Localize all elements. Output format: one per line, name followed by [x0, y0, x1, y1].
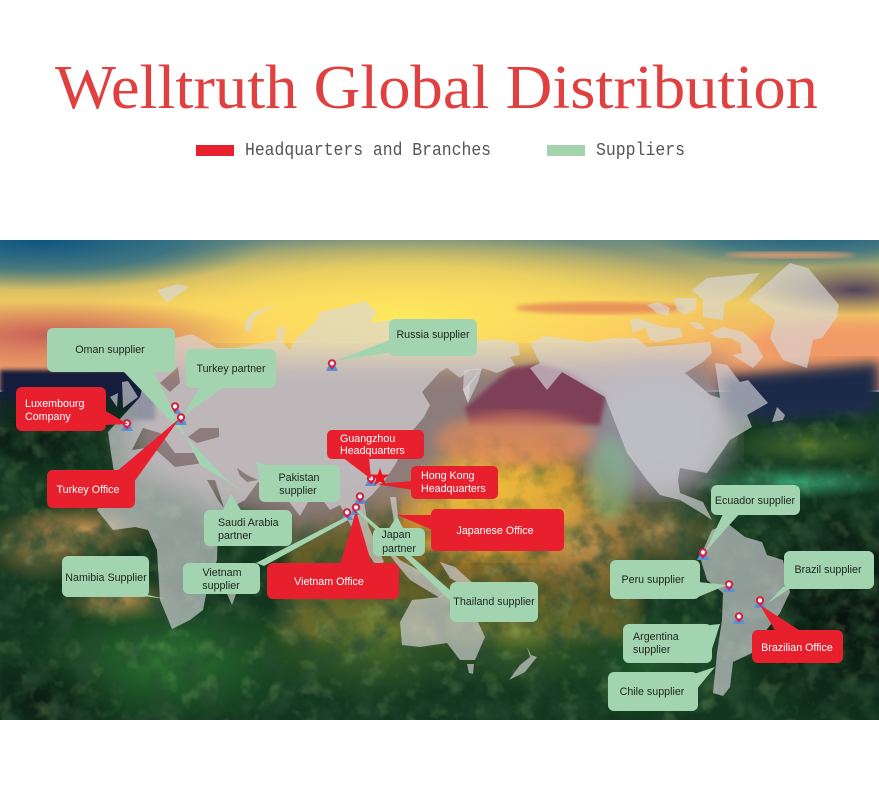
legend: [196, 141, 685, 161]
callout: Japan partner: Japan: [381, 529, 411, 541]
map: Europe, Asia and Africa: [97, 301, 520, 629]
icon: headquarters star: [371, 468, 389, 486]
map: Newfoundland: [772, 407, 785, 422]
map: New Zealand: [509, 647, 537, 680]
map: Arctic islands: [692, 273, 760, 320]
callout: Luxembourg Company: [16, 387, 128, 431]
map: Japan: [390, 497, 398, 522]
pin: Luxembourg: [121, 419, 133, 431]
callout: Pakistan supplier: supplier: [279, 485, 317, 497]
callout: Russia supplier: Russia supplier: [396, 329, 470, 341]
callout: Oman supplier: Oman supplier: [75, 344, 145, 356]
callout: Chile supplier: Chile supplier: [620, 686, 685, 698]
callout: Vietnam supplier: [183, 517, 348, 594]
map: Ireland: [110, 393, 118, 407]
callout: Turkey Office: [47, 418, 180, 508]
map: North America: [530, 336, 768, 520]
pin: Turkey office: [175, 413, 187, 425]
hazy hills and sunlit trees: [125, 360, 720, 530]
pin: Ecuador: [697, 548, 709, 560]
callout: Peru supplier: [610, 560, 727, 599]
legend swatch: headquarters and branches: [196, 145, 234, 156]
callout: Luxembourg Company: Company: [25, 411, 71, 423]
callout: Thailand supplier: Thailand supplier: [453, 596, 535, 608]
pin: Brazil: [754, 596, 766, 608]
callout: Saudi Arabia partner: [204, 494, 292, 546]
legend swatch: suppliers: [547, 145, 585, 156]
map: Kamchatka peninsula island: [463, 368, 482, 403]
pin: Argentina: [733, 612, 745, 624]
callout: Hong Kong Headquarters: Headquarters: [421, 483, 486, 495]
callout: Ecuador supplier: [705, 485, 800, 552]
callout: Guangzhou Headquarters: [327, 430, 424, 479]
callout: Japanese Office: [397, 509, 564, 551]
callout: Saudi Arabia partner: partner: [218, 530, 252, 542]
pin: Turkey partner: [169, 402, 181, 414]
pin: Guangzhou: [365, 474, 377, 486]
callout: Namibia Supplier: Namibia Supplier: [65, 572, 147, 584]
callout: Japanese Office: Japanese Office: [456, 525, 534, 537]
world map overlay: [97, 263, 839, 696]
forest base: [0, 392, 879, 720]
background photo: sunset over forest: [0, 240, 879, 720]
map: Britain: [122, 381, 138, 408]
callout: Pakistan supplier: Pakistan: [278, 472, 320, 484]
callout: Oman supplier: [47, 328, 246, 493]
callout: Brazil supplier: [768, 551, 874, 603]
map: South America: [700, 523, 790, 696]
callout: Brazilian Office: Brazilian Office: [761, 642, 833, 654]
title: Welltruth Global Distribution: [55, 54, 818, 122]
callout: Vietnam supplier: Vietnam: [202, 567, 242, 579]
legend label: suppliers: Suppliers: [596, 141, 685, 161]
map: Madagascar: [227, 594, 236, 605]
callout: Chile supplier: [608, 667, 715, 711]
callout: Argentina supplier: supplier: [633, 644, 671, 656]
pin: Peru: [723, 580, 735, 592]
callout: Russia supplier: [335, 319, 477, 361]
callout: Turkey Office: Turkey Office: [57, 484, 120, 496]
callout: Thailand supplier: [356, 510, 538, 622]
legend label: headquarters and branches: Headquarters and Branches: [245, 141, 491, 161]
map: Greenland small island: [157, 284, 189, 303]
callout: Japan partner: [373, 516, 425, 556]
callout: Brazilian Office: [752, 605, 843, 663]
callout: Turkey partner: Turkey partner: [196, 363, 266, 375]
callout: Saudi Arabia partner: Saudi Arabia: [218, 517, 279, 529]
callout: Vietnam supplier: supplier: [202, 580, 240, 592]
map: Greenland: [748, 263, 839, 368]
map: Tasmania: [467, 664, 474, 674]
callout: Guangzhou Headquarters: Guangzhou: [340, 433, 395, 445]
pins: southeast Asia: [341, 492, 366, 520]
map: Australia: [400, 590, 485, 660]
callout: Argentina supplier: Argentina: [633, 631, 679, 643]
callout: Namibia Supplier: [62, 556, 166, 599]
callout: Turkey partner: [184, 349, 276, 415]
map: Indonesia islands: [380, 540, 450, 598]
callout: Vietnam Office: [267, 514, 399, 599]
callout: Japan partner: partner: [382, 543, 416, 555]
callout: Argentina supplier: [623, 624, 720, 663]
callout: Luxembourg Company: Luxembourg: [25, 398, 84, 410]
callout: Peru supplier: Peru supplier: [622, 574, 685, 586]
pin: Russia: [326, 359, 338, 371]
callout: Pakistan supplier: [256, 462, 340, 502]
callout: Ecuador supplier: Ecuador supplier: [715, 495, 796, 507]
callout: Hong Kong Headquarters: Hong Kong: [421, 470, 475, 482]
callout: Guangzhou Headquarters: Headquarters: [340, 445, 405, 457]
callout: Hong Kong Headquarters: [376, 466, 498, 499]
map: Arctic arc island: [245, 304, 277, 333]
callout: Vietnam Office: Vietnam Office: [294, 576, 364, 588]
callout: Brazil supplier: Brazil supplier: [794, 564, 862, 576]
